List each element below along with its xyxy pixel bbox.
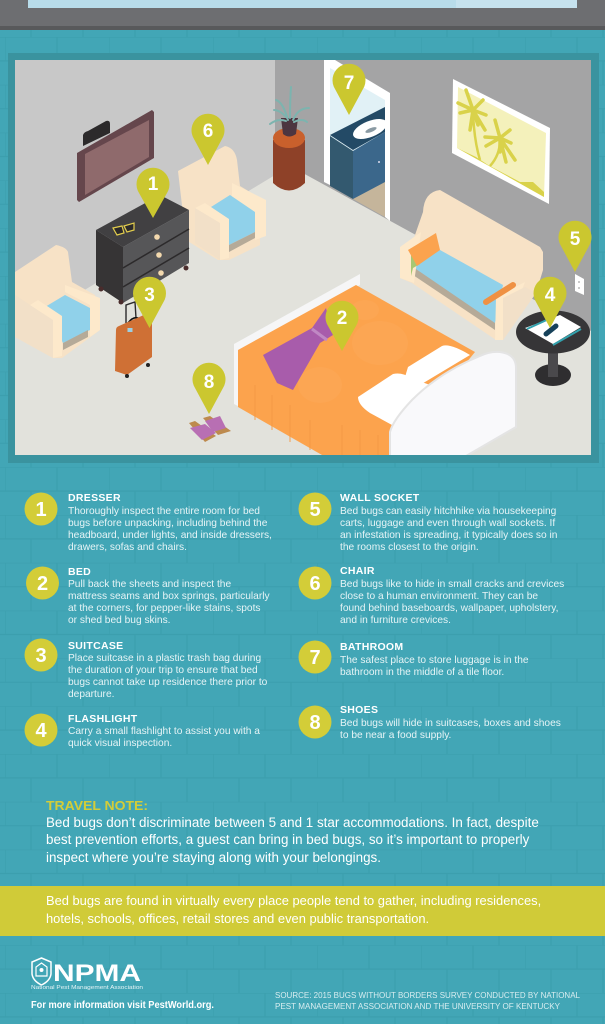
pillows: [358, 345, 470, 425]
icon: sunglasses: [113, 223, 134, 235]
legend item 2: bed: [26, 566, 270, 626]
legend item 1: dresser: bugs before unpacking, including behind the: [68, 518, 268, 529]
panel: hotel room illustration: [8, 53, 599, 463]
icon: planter with plant: [270, 87, 309, 190]
legend item 8: shoes: 8: [309, 712, 321, 734]
marker pin 3: [133, 277, 166, 328]
legend item 2: bed: Pull back the sheets and inspect the: [68, 579, 231, 590]
dress: [263, 308, 333, 390]
legend item 8: shoes: Bed bugs will hide in suitcases, boxes and shoes: [340, 718, 561, 729]
legend item 7: bathroom: The safest place to store luggage is in the: [340, 655, 529, 666]
source note: PEST MANAGEMENT ASSOCIATION AND THE UNIVERSITY OF KENTUCKY: [275, 1001, 560, 1011]
top window ledge: [0, 0, 605, 30]
marker pin 1: 1: [148, 174, 159, 195]
legend item 5: wall socket: carts, luggage and even through wall sockets. If: [340, 518, 555, 529]
marker pin 7: 7: [344, 73, 354, 94]
legend item 4: flashlight: [24, 713, 260, 749]
legend item 3: suitcase: SUITCASE: [68, 640, 124, 652]
travel note: TRAVEL NOTE:: [46, 798, 148, 813]
NPMA logo: [31, 958, 143, 991]
legend item 5: wall socket: 5: [309, 499, 321, 521]
legend item 1: dresser: Thoroughly inspect the entire room for bed: [68, 506, 260, 517]
legend item 3: suitcase: Place suitcase in a plastic trash bag during: [68, 653, 261, 664]
legend item 5: wall socket: an infestation is spreading, it typically does so in: [340, 530, 557, 541]
legend item 6: chair: CHAIR: [340, 565, 375, 577]
marker pin 2: 2: [337, 308, 347, 329]
wall socket: [575, 274, 584, 295]
yellow banner: hotels, schools, offices, retail stores and even public transportation.: [46, 911, 429, 926]
beach picture: [452, 79, 550, 204]
travel note: best prevention efforts, a guest can bring in bed bugs, so it’s important to properly: [46, 832, 530, 847]
legend item 2: bed: or shed bed bug skins.: [68, 615, 171, 626]
legend item 6: chair: close to a human environment. They can be: [340, 591, 538, 602]
headboard: [388, 352, 518, 458]
marker pin 6: [192, 114, 224, 165]
marker pin 8: [193, 363, 226, 414]
legend item 6: chair: [298, 565, 564, 626]
legend item 1: dresser: 1: [35, 499, 47, 521]
yellow banner: [0, 886, 605, 936]
armchair: back right: [178, 146, 266, 260]
legend item 6: chair: 6: [309, 573, 321, 595]
legend item 8: shoes: to be near a food supply.: [340, 730, 451, 741]
marker pin 1: [136, 168, 170, 218]
suitcase: [115, 302, 152, 378]
legend item 6: chair: and in furniture crevices.: [340, 615, 451, 626]
legend item 7: bathroom: [298, 640, 529, 678]
bathroom doorway: [324, 60, 390, 221]
sandals: [189, 416, 231, 442]
legend item 3: suitcase: departure.: [68, 689, 114, 700]
legend item 3: suitcase: the duration of your trip to ensure that bed: [68, 665, 258, 676]
legend item 3: suitcase: [24, 638, 268, 700]
marker pin 4: [534, 277, 566, 328]
legend item 5: wall socket: [298, 492, 557, 553]
legend item 2: bed: mattress seams and box springs, particularly: [68, 591, 270, 602]
legend item 2: bed: 2: [37, 573, 48, 595]
legend item 8: shoes: SHOES: [340, 704, 378, 716]
legend item 3: suitcase: 3: [35, 645, 47, 667]
dresser: [96, 195, 189, 304]
legend item 5: wall socket: Bed bugs can easily hitchhike via housekeeping: [340, 506, 557, 517]
legend item 1: dresser: DRESSER: [68, 492, 121, 504]
marker pin 5: 5: [570, 229, 581, 250]
travel note: Bed bugs don’t discriminate between 5 and 1 star accommodations. In fact, despite: [46, 815, 539, 830]
marker pin 4: 4: [545, 285, 556, 306]
yellow banner: Bed bugs are found in virtually every place people tend to gather, including residences,: [46, 893, 541, 908]
NPMA logo: NPMA: [53, 960, 141, 987]
legend item 1: dresser: drawers, sofas and chairs.: [68, 542, 187, 553]
marker pin 2: [326, 301, 358, 351]
more information line: For more information visit PestWorld.org.: [31, 1000, 214, 1011]
source note: [275, 990, 580, 1011]
legend item 7: bathroom: BATHROOM: [340, 641, 403, 653]
source note: SOURCE: 2015 BUGS WITHOUT BORDERS SURVEY CONDUCTED BY NATIONAL: [275, 990, 580, 1000]
marker pin 3: 3: [144, 285, 155, 306]
legend item 5: wall socket: the rooms closest to the origin.: [340, 542, 479, 553]
legend item 1: dresser: [24, 492, 272, 553]
legend item 3: suitcase: bugs cannot take up residence there prior to: [68, 677, 268, 688]
marker pin 7: [333, 64, 366, 115]
legend item 4: flashlight: FLASHLIGHT: [68, 713, 138, 725]
legend item 2: bed: at the corners, for pepper-like stains, spots: [68, 603, 261, 614]
travel note: inspect where you’re staying along with your belongings.: [46, 850, 381, 865]
side table with flashlight: [516, 310, 590, 386]
legend item 5: wall socket: WALL SOCKET: [340, 492, 420, 504]
marker pin 8: 8: [204, 372, 214, 393]
legend item 7: bathroom: bathroom in the middle of a tile floor.: [340, 667, 504, 678]
sofa: [400, 190, 543, 340]
legend item 7: bathroom: 7: [309, 647, 321, 669]
legend item 4: flashlight: quick visual inspection.: [68, 738, 172, 749]
travel note: [46, 798, 539, 865]
legend item 4: flashlight: Carry a small flashlight to assist you with a: [68, 726, 260, 737]
legend item 2: bed: BED: [68, 566, 91, 578]
NPMA logo: National Pest Management Association: [31, 985, 143, 991]
armchair: front left: [15, 245, 100, 358]
television: [77, 110, 154, 202]
legend item 4: flashlight: 4: [35, 720, 47, 742]
legend item 8: shoes: [298, 704, 561, 741]
legend item 1: dresser: headboard, under lights, and inside dressers,: [68, 530, 272, 541]
marker pin 6: 6: [203, 121, 213, 142]
bed: [234, 274, 518, 458]
legend item 6: chair: Bed bugs like to hide in small cracks and crevices: [340, 579, 564, 590]
legend item 6: chair: found behind baseboards, wallpaper, upholstery,: [340, 603, 558, 614]
marker pin 5: [559, 221, 592, 272]
